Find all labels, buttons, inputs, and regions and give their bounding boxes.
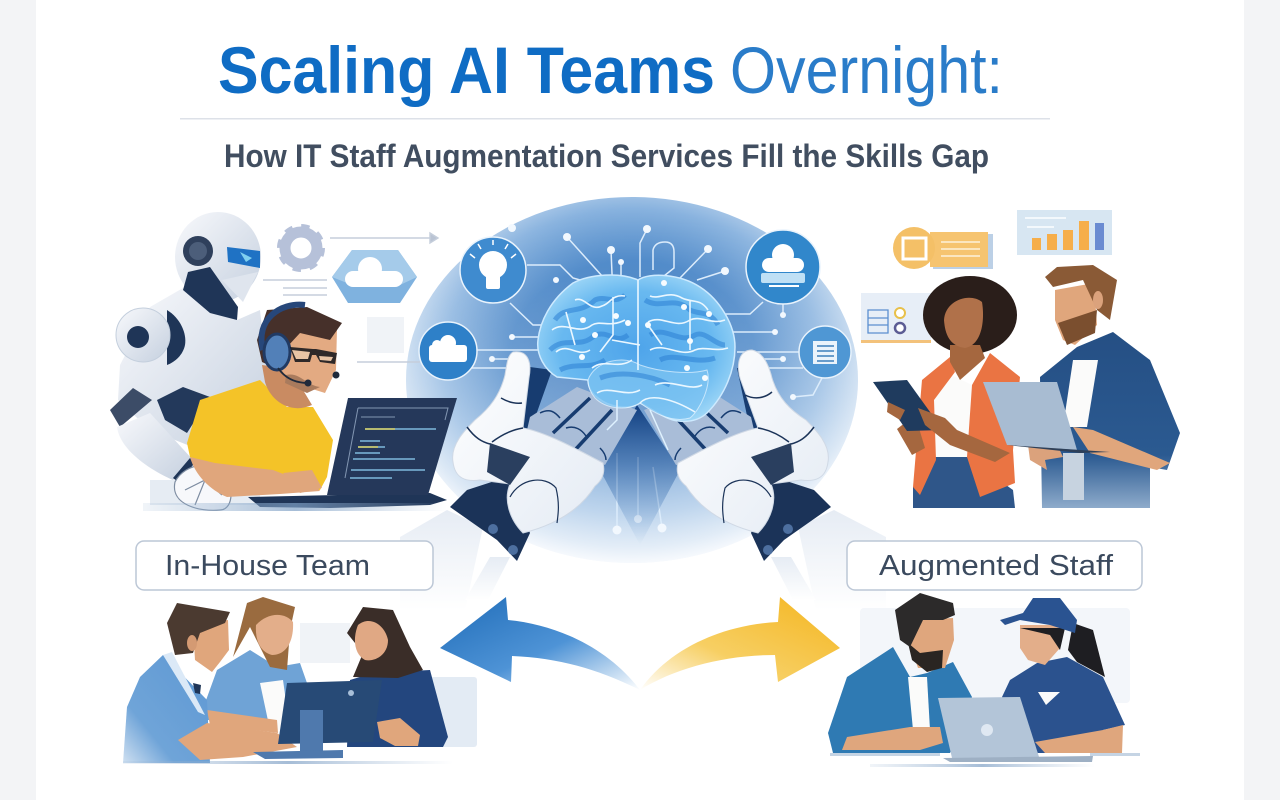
title: Scaling AI Teams (218, 33, 715, 107)
icon: lightbulb (460, 237, 526, 303)
blue arrow (440, 597, 640, 690)
in-house team illustration (123, 597, 477, 764)
label: In-House Team (136, 541, 433, 590)
arrows and lines left (263, 233, 438, 362)
label: Augmented Staff (847, 541, 1142, 590)
faded document (367, 317, 404, 353)
right robotic hand (644, 350, 886, 610)
laptop with code (143, 398, 457, 511)
circuit lines around the brain (472, 224, 822, 534)
yellow arrow (640, 597, 840, 690)
left robotic hand (400, 352, 680, 610)
icon: cloud right (746, 230, 820, 304)
bar chart card (1017, 210, 1112, 255)
man with beard holding laptop (983, 265, 1180, 508)
woman in orange jacket (873, 276, 1020, 508)
title: Overnight: (730, 33, 1003, 107)
subtitle: How IT Staff Augmentation Services Fill the Skills Gap (224, 138, 989, 174)
icon: cloud hexagon (332, 250, 417, 303)
robot (110, 212, 268, 510)
glowing AI brain (538, 275, 735, 450)
dashboard card (861, 293, 931, 343)
augmented staff illustration (828, 593, 1140, 767)
card icon: chat (893, 227, 993, 269)
icon: cloud left (419, 322, 477, 380)
label: In-House Team: In-House Team (165, 550, 370, 582)
man in yellow shirt with headset (187, 305, 342, 497)
central glowing orb (406, 197, 858, 563)
icon: document (799, 326, 851, 378)
icon: gear (280, 227, 322, 269)
title (218, 33, 1003, 107)
label: Augmented Staff: Augmented Staff (879, 550, 1114, 582)
